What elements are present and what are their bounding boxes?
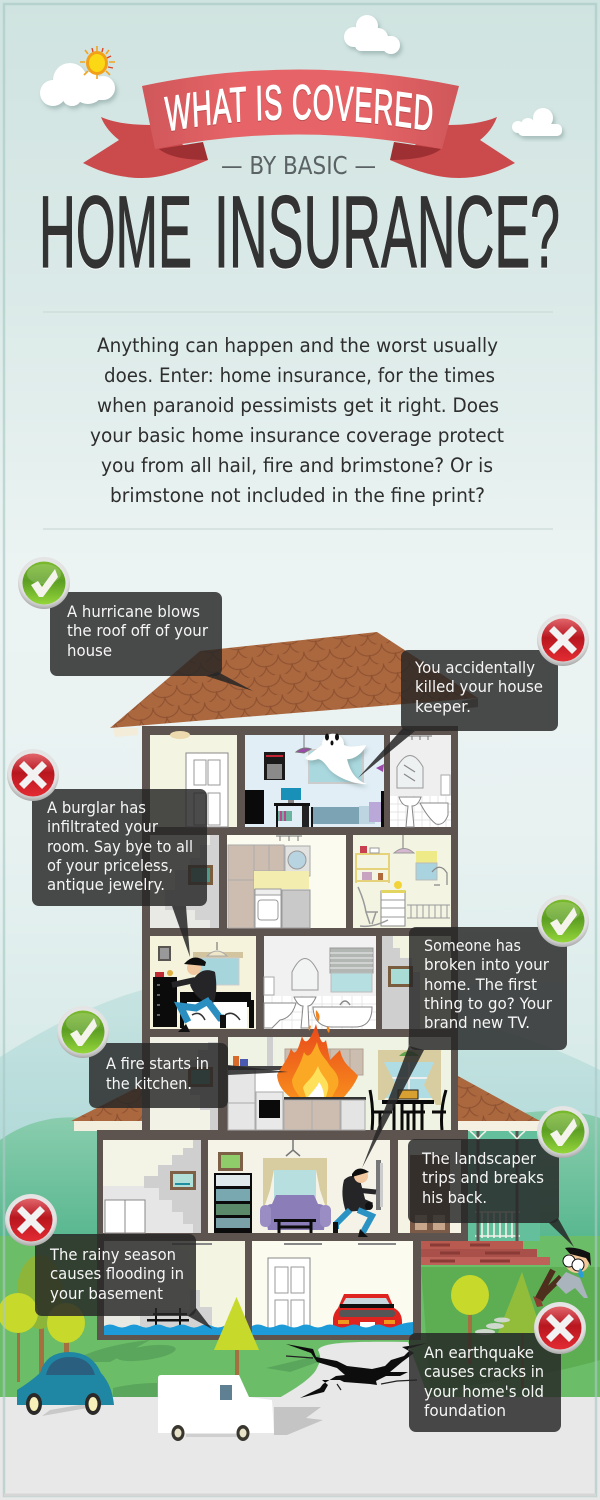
callout: earthquake: your home's old [424,1382,544,1401]
callout: burglar jewelry: A burglar has [47,798,146,817]
cloud top [344,15,400,54]
bottom border [4,1494,596,1496]
room: laundry kitchen [227,835,346,928]
callout: flooding: your basement [50,1284,163,1303]
callout: earthquake: An earthquake [424,1343,534,1362]
room: front door [398,1140,461,1233]
callout: house keeper: keeper. [415,697,471,716]
callout: hurricane: house [67,641,112,660]
icon: covered check hurricane [18,557,70,609]
burglar stealing tv [333,1160,383,1237]
callout: landscaper [408,1139,574,1247]
callout: landscaper: The landscaper [421,1149,536,1168]
cloud right [512,108,562,136]
trees [0,1255,542,1388]
icon: covered check landscaper [537,1106,589,1158]
room: kitchen on fire [150,1037,451,1130]
callout: stolen tv: thing to go? Your [424,994,552,1013]
room: main bathroom [264,936,376,1029]
icon: not covered earthquake [534,1302,586,1354]
room: basement stairs [103,1140,201,1233]
porch [468,1131,540,1241]
callout: burglar jewelry: of your priceless, [47,856,173,875]
intro paragraph: brimstone not included in the fine print? [110,484,485,507]
injured landscaper [533,1248,591,1307]
callout: earthquake: causes cracks in [424,1362,544,1381]
callout: burglar jewelry [32,789,207,957]
callout: stolen tv: home. The first [424,975,537,994]
callout: earthquake: foundation [424,1401,506,1420]
heading: home insurance: HOME [39,175,192,289]
room: entry hall [150,731,237,827]
blue car [17,1352,114,1416]
callout: earthquake [409,1333,561,1432]
landscape hills [0,990,600,1240]
picnic bench [147,1308,189,1326]
callout: hurricane [50,592,253,691]
callout: stolen tv [362,927,567,1168]
callout: stolen tv: broken into your [424,955,549,974]
callout: flooding: The rainy season [49,1245,176,1264]
callout: landscaper: his back. [422,1188,487,1207]
crack in ground [286,1343,427,1398]
callout: flooding: causes flooding in [50,1264,184,1283]
flood water [104,1322,413,1335]
callout: stolen tv: Someone has [424,936,521,955]
cracked driveway [272,1342,430,1402]
intro paragraph: your basic home insurance coverage protect [90,424,504,447]
roof [110,632,478,737]
room: bedroom with ghost [245,735,384,827]
icon: not covered house keeper [537,614,589,666]
heading: what is covered: WHAT IS COVERED [164,84,432,132]
title ribbon [83,70,515,178]
room: upstairs bathroom [390,735,451,827]
room: jewelry bedroom [150,936,256,1029]
icon: covered check fire [57,1006,109,1058]
burglar at dresser [155,957,226,1032]
ghost [305,734,367,784]
brick steps [421,1241,550,1265]
side roofs [71,1076,542,1131]
ribbon band [142,70,459,149]
callout: hurricane: the roof off of your [67,621,208,640]
intro paragraph: Anything can happen and the worst usually [97,334,498,357]
callout: stolen tv: brand new TV. [424,1013,530,1032]
callout: house keeper [358,650,558,778]
callout: burglar jewelry: antique jewelry. [47,875,165,894]
icon: not covered flooding [5,1194,57,1246]
callout: landscaper: trips and breaks [422,1168,544,1187]
ribbon tails [83,117,208,178]
callout: house keeper: killed your house [415,677,543,696]
lawn [0,1236,600,1398]
intro paragraph: does. Enter: home insurance, for the times [104,364,495,387]
icon: sun [80,46,115,79]
callout: kitchen fire: A fire starts in [106,1054,209,1073]
room: nursery [353,835,451,928]
icon: covered check tv theft [537,895,589,947]
room: flooded garage [104,1241,413,1335]
callout: kitchen fire [89,1043,288,1108]
callout: burglar jewelry: infiltrated your [47,817,158,836]
callout: kitchen fire: the kitchen. [106,1074,192,1093]
room: second floor stairs [150,835,219,928]
cloud with sun [40,46,115,106]
flooded red car [333,1294,402,1328]
house frame [97,726,468,1340]
room: third floor stairs [382,936,451,1029]
intro paragraph: when paranoid pessimists get it right. Does [97,394,499,417]
fire [277,1010,358,1097]
callout: house keeper: You accidentally [414,658,535,677]
room: living room [208,1140,390,1233]
intro paragraph: you from all hail, fire and brimstone? Or is [101,454,493,477]
road [0,1397,600,1500]
icon: not covered burglar [7,749,59,801]
callout: hurricane: A hurricane blows [67,602,200,621]
subheading: by basic: — BY BASIC — [221,151,376,180]
callout: burglar jewelry: room. Say bye to all [47,837,193,856]
callout: flooding [35,1234,212,1329]
white van [158,1375,323,1441]
